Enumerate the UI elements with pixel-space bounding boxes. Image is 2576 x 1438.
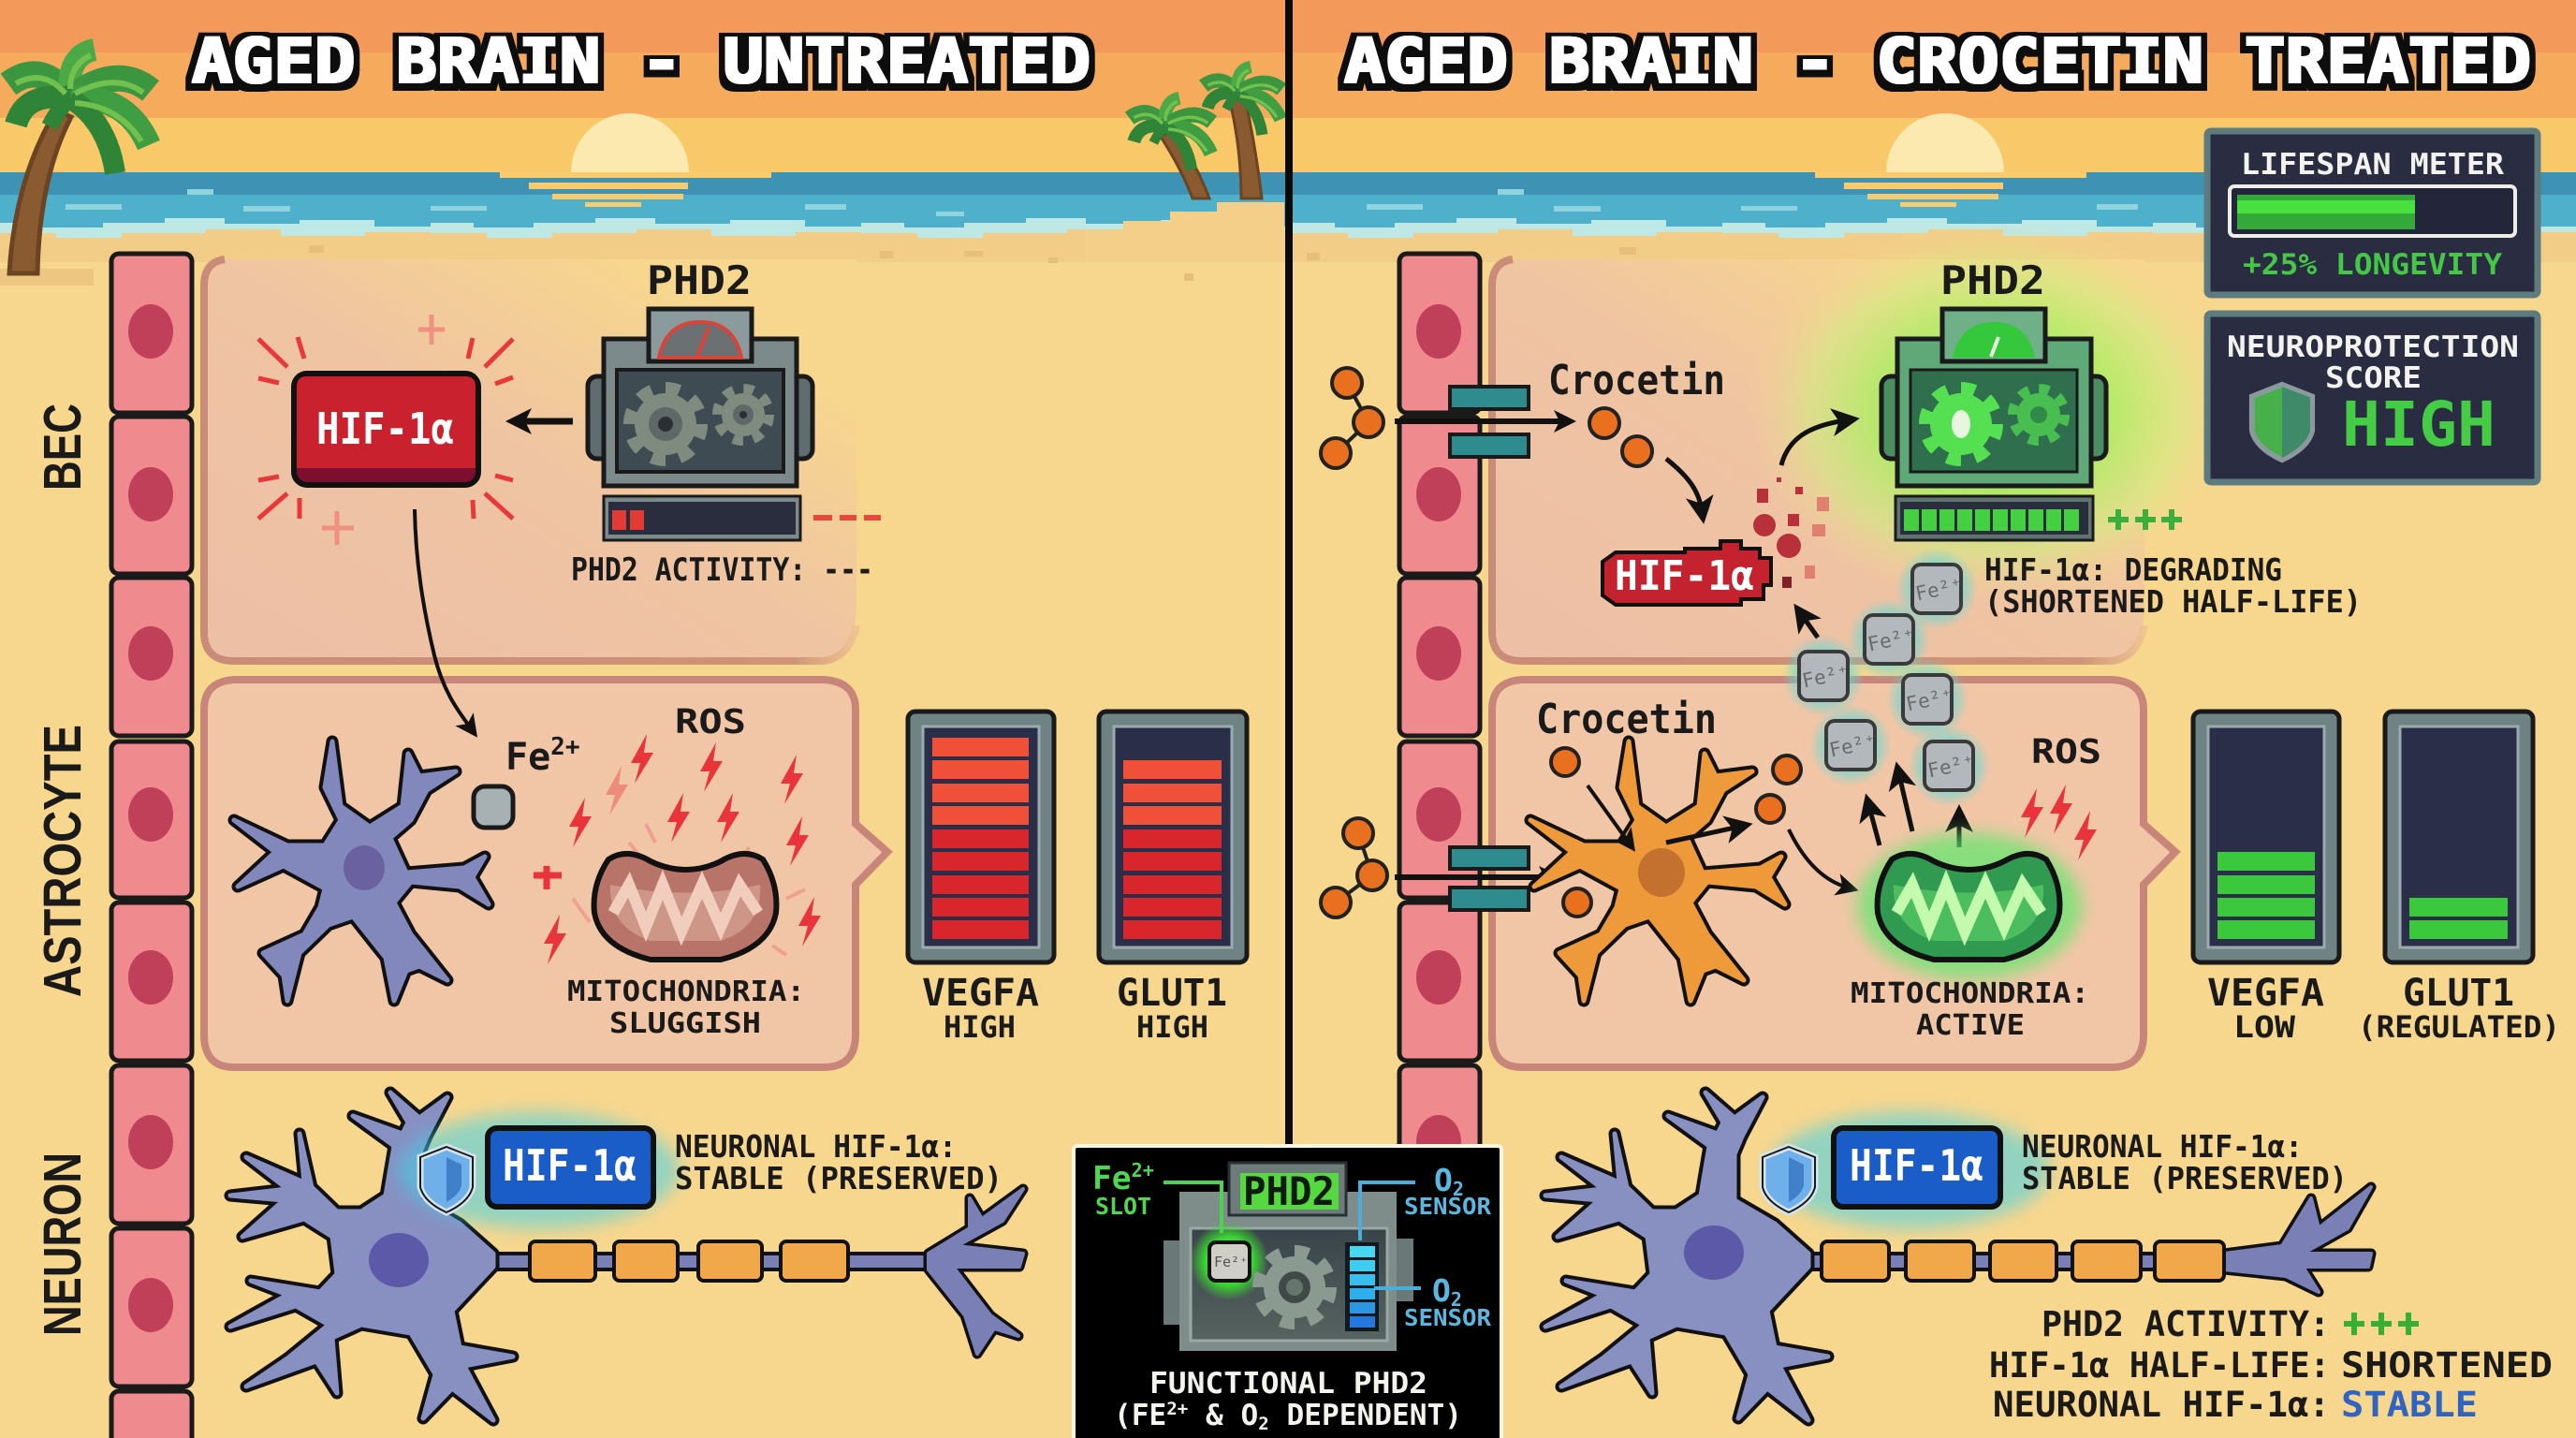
label: Crocetin BEC: Crocetin	[1548, 357, 1725, 404]
text: PHD2 activity: PHD2 ACTIVITY: ---	[571, 551, 873, 589]
inset labels: 2+	[1132, 1159, 1154, 1181]
arrow: HIF-1α to astrocyte	[415, 509, 471, 728]
summary text right: SHORTENED	[2341, 1345, 2553, 1386]
labels: GLUT1 regulated: (REGULATED)	[2358, 1009, 2560, 1045]
text: HIF-1α degrading	[1984, 551, 2362, 620]
icon: active mitochondrion	[1857, 833, 2082, 979]
icon: degrading HIF-1α	[1603, 541, 1771, 605]
Fe2+ chips moving: Fe²⁺	[1866, 624, 1917, 655]
glow: active PHD2	[1746, 220, 2242, 604]
inset labels: SENSOR	[1404, 1304, 1492, 1331]
bar: VEGFA low	[2193, 712, 2339, 962]
icon: sluggish mitochondrion	[594, 854, 776, 960]
arrow: crocetin entry astrocyte	[1395, 874, 1550, 880]
box: HIF-1α stable right: HIF-1α	[1850, 1140, 1983, 1191]
labels: VEGFA low	[2207, 972, 2324, 1045]
inset labels: O	[1432, 1272, 1451, 1309]
icon: shield right	[1763, 1147, 1815, 1212]
icon: astrocyte orange	[1530, 741, 1785, 1001]
inset labels	[1092, 1159, 1492, 1434]
icon: stabilized HIF-1α box	[294, 374, 478, 485]
labels: GLUT1 high: GLUT1	[1117, 972, 1227, 1015]
text: HIF-1α degrading: (SHORTENED HALF-LIFE)	[1984, 583, 2362, 620]
labels: VEGFA low: LOW	[2233, 1009, 2296, 1045]
text: mitochondria sluggish: MITOCHONDRIA:	[567, 976, 805, 1008]
icon: neuron right	[1545, 1093, 2371, 1420]
panel: lifespan meter: LIFESPAN METER	[2241, 148, 2504, 182]
text: neuronal HIF-1α left: STABLE (PRESERVED)	[675, 1160, 1003, 1196]
text: mitochondria sluggish: SLUGGISH	[609, 1007, 761, 1040]
inset callout lines	[1164, 1182, 1421, 1288]
text: neuronal HIF-1α right: NEURONAL HIF-1α:	[2022, 1128, 2303, 1165]
panel: lifespan meter	[2207, 131, 2538, 295]
Fe2+ chips moving: Fe²⁺	[1913, 574, 1965, 605]
label: ROS left: ROS	[675, 703, 746, 741]
sun: right	[1815, 113, 2086, 207]
summary text right: STABLE	[2341, 1385, 2478, 1425]
text: HIF-1α degrading: HIF-1α: DEGRADING	[1984, 551, 2282, 588]
particles: HIF-1α fragments	[1753, 477, 1829, 588]
arrows inside astrocyte	[1588, 775, 1959, 888]
glow: neuroprotection left	[398, 1112, 679, 1228]
right palm trees	[1130, 66, 1281, 198]
summary text right: PHD2 ACTIVITY:	[2042, 1304, 2330, 1344]
inset labels: (FE	[1114, 1399, 1166, 1432]
row label: astrocyte: ASTROCYTE	[33, 725, 93, 997]
bar: VEGFA high	[908, 712, 1054, 962]
icon: active PHD2 machine	[1881, 309, 2106, 486]
panel: right astrocyte compartment	[1492, 680, 2175, 1067]
text: mitochondria active: ACTIVE	[1916, 1009, 2025, 1042]
labels: VEGFA high	[922, 972, 1039, 1045]
labels: GLUT1 high	[1117, 972, 1227, 1045]
inset labels: DEPENDENT)	[1269, 1399, 1462, 1432]
panel: functional PHD2 inset	[1074, 1146, 1501, 1438]
icon: inactive PHD2 machine	[588, 309, 812, 486]
panel: left BEC compartment	[204, 259, 856, 661]
crocetin dots in BEC	[1589, 408, 1652, 466]
label: PHD2 right: PHD2	[1940, 257, 2045, 303]
crocetin dots in astrocyte	[1551, 748, 1801, 917]
inset labels: 2+	[1166, 1399, 1188, 1419]
endothelial cell wall: left	[111, 254, 192, 1438]
label: PHD2 left: PHD2	[647, 257, 752, 303]
Fe2+ chips moving	[1782, 548, 1990, 807]
text: neuronal HIF-1α right: STABLE (PRESERVED)	[2022, 1160, 2348, 1196]
gauge: PHD2 activity low	[604, 496, 881, 540]
icon: reduced ROS bolts	[2021, 785, 2097, 860]
sun: left	[500, 113, 771, 207]
gauge: PHD2 activity high	[1895, 496, 2093, 540]
membrane channel astrocyte	[1450, 847, 1529, 910]
labels: GLUT1 regulated	[2358, 972, 2560, 1045]
icon: plus signs +++	[2108, 509, 2182, 530]
summary text right: HIF-1α HALF-LIFE:	[1989, 1345, 2330, 1386]
text: mitochondria sluggish	[567, 976, 805, 1040]
title: untreated: AGED BRAIN - UNTREATED	[192, 25, 1090, 97]
row label: BEC: BEC	[33, 404, 93, 491]
inset machine: Fe²⁺	[1214, 1254, 1248, 1270]
panel: neuroprotection score: SCORE	[2325, 361, 2422, 395]
arrow: crocetin to HIF-1α	[1666, 459, 1702, 510]
label: Crocetin astrocyte: Crocetin	[1536, 696, 1717, 743]
inset labels: SLOT	[1095, 1193, 1151, 1220]
inset machine	[1164, 1163, 1413, 1351]
inset labels: Fe	[1092, 1160, 1131, 1197]
Fe2+ chips moving: Fe²⁺	[1904, 684, 1955, 715]
text: neuronal HIF-1α left: NEURONAL HIF-1α:	[675, 1128, 957, 1165]
left palm tree	[0, 50, 151, 286]
arrow: crocetin entry BEC	[1395, 418, 1565, 424]
labels: VEGFA high: VEGFA	[922, 972, 1039, 1015]
summary text right: NEURONAL HIF-1α:	[1993, 1385, 2330, 1425]
text: neuronal HIF-1α left	[675, 1128, 1003, 1196]
inset labels: SENSOR	[1404, 1193, 1492, 1220]
Fe2+ chips moving: Fe²⁺	[1800, 661, 1852, 692]
Fe2+ chips moving: Fe²⁺	[1827, 730, 1879, 761]
panel: neuroprotection score: NEUROPROTECTION	[2227, 330, 2519, 364]
icon: astrocyte grey	[234, 741, 489, 1001]
crocetin molecule outside BEC	[1321, 368, 1383, 468]
inset labels: 2	[1451, 1288, 1462, 1311]
icon: stabilized HIF-1α box: HIF-1α	[316, 404, 454, 454]
icon: ROS bolts	[534, 734, 821, 964]
panel: neuroprotection score	[2207, 314, 2538, 482]
Fe2+ chips moving: Fe²⁺	[1925, 751, 1977, 782]
panel: right BEC compartment	[1492, 259, 2144, 661]
labels: VEGFA high: HIGH	[944, 1009, 1016, 1045]
membrane channel BEC	[1450, 387, 1529, 457]
text: neuronal HIF-1α right	[2022, 1128, 2348, 1196]
icon: shield left	[420, 1147, 473, 1212]
arrow: Fe to HIF degrade	[1802, 615, 1818, 638]
inset labels: 2	[1258, 1414, 1269, 1434]
labels: GLUT1 regulated: GLUT1	[2403, 972, 2514, 1015]
bar: GLUT1 regulated	[2385, 712, 2533, 962]
panel: left astrocyte compartment	[204, 680, 887, 1067]
inset machine: PHD2	[1243, 1168, 1335, 1214]
icon: neuron left	[230, 1093, 1023, 1420]
divider between panels	[1285, 0, 1293, 1147]
title: crocetin treated: AGED BRAIN - CROCETIN TREATED	[1344, 25, 2531, 97]
labels: GLUT1 high: HIGH	[1136, 1009, 1208, 1045]
box: HIF-1α stable left: HIF-1α	[503, 1140, 637, 1191]
icon: degrading HIF-1α: HIF-1α	[1615, 552, 1754, 600]
bar: GLUT1 high	[1099, 712, 1247, 962]
arrow: inhibition from PHD2 to HIF-1α	[519, 418, 573, 425]
box: HIF-1α stable left	[488, 1128, 653, 1207]
icon: Fe chip	[474, 786, 513, 828]
row label: neuron: NEURON	[33, 1152, 93, 1336]
crocetin molecule at astrocyte wall	[1321, 818, 1387, 917]
label: Fe2+ left: 2+	[550, 733, 579, 761]
arrow: to active PHD2	[1781, 420, 1846, 465]
text: mitochondria active	[1851, 977, 2089, 1042]
inset labels: 2	[1453, 1178, 1464, 1200]
endothelial cell wall: right	[1399, 254, 1480, 1169]
label: Fe2+ left: Fe	[505, 736, 550, 779]
box: HIF-1α stable right	[1834, 1128, 2000, 1207]
glow: neuroprotection right	[1769, 1112, 2050, 1228]
inset labels: FUNCTIONAL PHD2	[1149, 1367, 1427, 1401]
panel: neuroprotection score: HIGH	[2342, 389, 2496, 461]
labels: VEGFA low: VEGFA	[2207, 972, 2324, 1015]
panel: lifespan meter: +25% LONGEVITY	[2243, 248, 2502, 282]
inset labels: O	[1434, 1162, 1453, 1198]
burst sparks around HIF-1α	[258, 315, 513, 545]
label: ROS right: ROS	[2031, 733, 2101, 771]
text: mitochondria active: MITOCHONDRIA:	[1851, 977, 2089, 1010]
summary text right	[1989, 1304, 2553, 1425]
inset labels: & O	[1188, 1399, 1258, 1432]
